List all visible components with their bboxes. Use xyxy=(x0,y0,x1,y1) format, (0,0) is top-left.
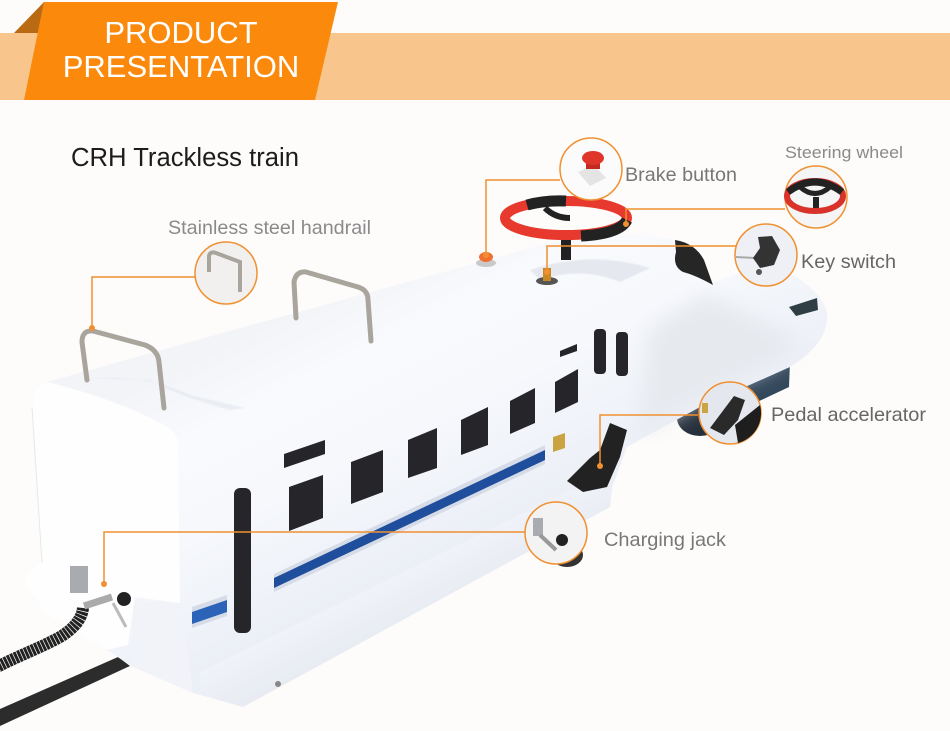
callout: stainless steel handrail: Stainless steel handrail xyxy=(168,217,371,239)
leader end dots xyxy=(89,221,629,587)
train body silhouette xyxy=(25,234,827,707)
handrails xyxy=(82,272,371,408)
subtitle: CRH Trackless train xyxy=(71,144,299,172)
wheels and underside xyxy=(551,362,790,567)
tow bar xyxy=(0,657,130,726)
heading: product presentation: PRESENTATION xyxy=(63,49,299,84)
callout: pedal accelerator xyxy=(699,382,927,444)
cab windshield xyxy=(675,240,713,285)
callout leaders xyxy=(92,180,785,583)
blue stripes xyxy=(192,445,545,628)
callout: charging jack xyxy=(525,502,726,564)
callout: steering wheel xyxy=(785,144,903,228)
rear face xyxy=(25,382,180,650)
brake button on train xyxy=(476,252,496,267)
rear lower block xyxy=(133,600,193,693)
steering wheel xyxy=(505,201,627,260)
rear face edge xyxy=(32,407,42,563)
header banner xyxy=(0,2,950,100)
side windows xyxy=(234,298,818,633)
heading: product presentation: PRODUCT xyxy=(104,15,258,50)
callout: stainless steel handrail xyxy=(168,217,371,304)
roof shadows xyxy=(92,259,650,410)
callout: steering wheel: Steering wheel xyxy=(785,144,903,162)
key switch on train xyxy=(536,268,558,285)
nose shading xyxy=(640,295,800,435)
train xyxy=(0,201,827,726)
yellow mark xyxy=(553,433,565,452)
callout: pedal accelerator: Pedal accelerator xyxy=(771,404,927,426)
callout: brake button: Brake button xyxy=(625,164,737,186)
bottom plate xyxy=(200,488,612,707)
bottom marker xyxy=(275,681,281,687)
coiled cable xyxy=(0,608,83,668)
callout: brake button xyxy=(560,138,737,200)
charging jack on train xyxy=(70,566,131,627)
callout: charging jack: Charging jack xyxy=(604,529,726,551)
pedal accelerator on train xyxy=(567,423,627,492)
callout: key switch xyxy=(735,224,896,286)
callout: key switch: Key switch xyxy=(801,251,896,273)
